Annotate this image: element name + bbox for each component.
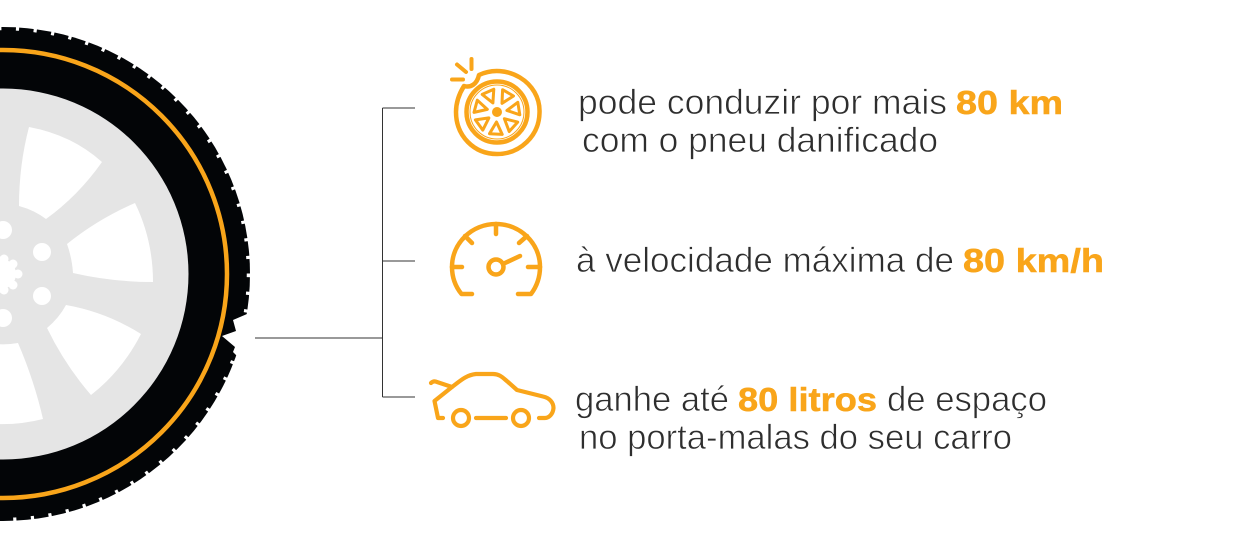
connector lines <box>255 108 415 397</box>
text: 80 km <box>578 83 1063 160</box>
orange tyre ring <box>0 50 227 498</box>
floor line <box>476 416 506 420</box>
sparks <box>452 59 472 80</box>
text: 80 km: com o pneu danificado <box>582 121 938 160</box>
dial ticks <box>452 224 540 267</box>
tyre outline with bite <box>456 71 540 154</box>
wheel rim <box>0 88 188 460</box>
dial arc <box>452 224 540 294</box>
rim <box>466 82 528 142</box>
hub <box>493 108 501 116</box>
icon: car with open trunk <box>431 374 554 426</box>
trunk lid <box>431 381 452 387</box>
rim window: top <box>19 127 102 219</box>
tyre body <box>0 27 250 521</box>
wheels <box>453 410 469 426</box>
icon: damaged tyre <box>452 59 540 154</box>
car body <box>434 374 554 418</box>
wheel hub <box>0 254 22 294</box>
wheel bolt holes <box>0 221 51 327</box>
tyre tread notches <box>0 28 249 520</box>
text: 80 km/h: à velocidade máxima de <box>576 241 954 280</box>
needle hub <box>488 260 504 274</box>
spoke windows <box>474 89 520 134</box>
icon: speedometer <box>452 224 540 294</box>
text: 80 litros <box>575 380 1047 457</box>
text: 80 litros: 80 litros <box>738 381 877 418</box>
illustration: damaged tyre and wheel <box>0 27 256 521</box>
rim window: right <box>67 203 153 282</box>
text: 80 km/h: 80 km/h <box>963 242 1104 279</box>
needle <box>505 256 520 263</box>
text: 80 km: 80 km <box>956 84 1063 121</box>
text: 80 litros: de espaço <box>887 380 1047 419</box>
tyre puncture cut <box>222 308 256 362</box>
text: 80 km: pode conduzir por mais <box>578 83 947 122</box>
rim window: lower right <box>47 305 141 395</box>
text: 80 litros: no porta-malas do seu carro <box>579 418 1012 457</box>
rim window: bottom <box>0 343 43 424</box>
text: 80 litros: ganhe até <box>575 380 729 419</box>
